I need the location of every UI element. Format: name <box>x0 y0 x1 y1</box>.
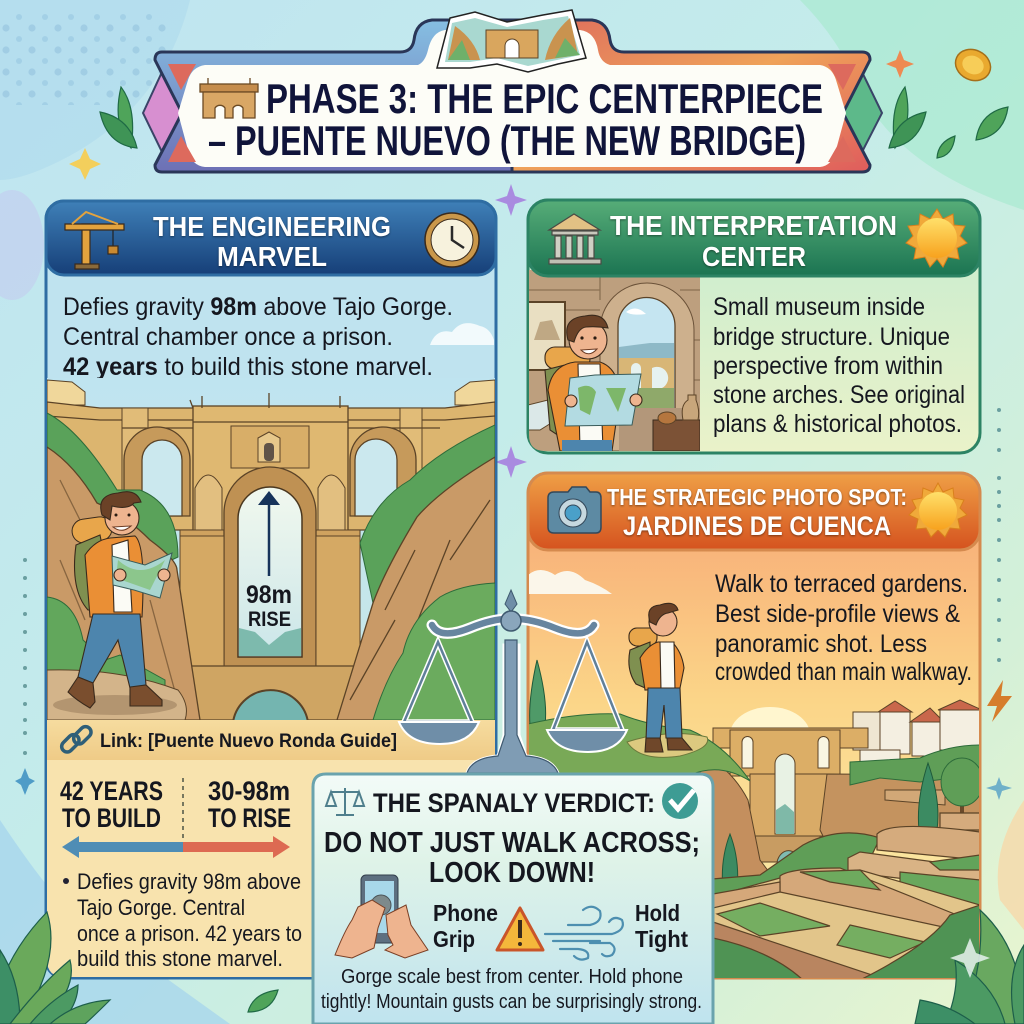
text block: bullet summary: Tajo Gorge. Central <box>77 895 245 920</box>
verdict statement <box>324 827 700 889</box>
text block: interpretation body: stone arches. See original <box>713 381 965 409</box>
text block: photo spot body: panoramic shot. Less <box>715 630 927 658</box>
icon: chain link <box>59 724 93 754</box>
icon: sun <box>906 209 967 267</box>
panel: the strategic photo spot <box>528 473 983 980</box>
text block: interpretation body <box>713 293 965 438</box>
icon: title bridge <box>200 78 258 118</box>
illustration: hiker inside the arches <box>528 270 700 454</box>
label: 98m rise arrow: 98m <box>246 581 292 609</box>
hiker standing <box>629 603 692 752</box>
text block: interpretation body: perspective from within <box>713 352 943 380</box>
text block: engineering intro: 42 years to build this stone marvel. <box>63 353 433 381</box>
decor: foliage bottom right <box>915 910 1024 1024</box>
label: phone grip: Grip <box>433 926 475 952</box>
icon: wind gusts <box>545 907 623 960</box>
title text: PHASE 3: THE EPIC CENTERPIECE <box>266 75 823 122</box>
text block: verdict advice: Gorge scale best from center. Hold phone <box>341 966 683 988</box>
label: hold tight <box>635 900 688 952</box>
panel section: key stats <box>47 760 495 977</box>
panel: the engineering marvel <box>46 201 496 978</box>
title text: – PUENTE NUEVO (THE NEW BRIDGE) <box>208 117 806 164</box>
title text <box>208 75 823 164</box>
text block: engineering intro <box>63 293 494 381</box>
distant cypress <box>530 660 546 725</box>
text block: bullet summary: once a prison. 42 years to <box>77 921 302 946</box>
header: strategic photo spot: JARDINES DE CUENCA <box>623 511 891 541</box>
text block: engineering intro: Defies gravity 98m above Tajo Gorge. <box>63 293 453 321</box>
header: the interpretation center <box>528 200 980 276</box>
text block: verdict advice <box>321 966 702 1013</box>
banner frame <box>155 20 870 172</box>
icon: gold coin <box>950 44 996 86</box>
decor: sparkles <box>15 50 1012 800</box>
stat: 42 years to build: TO BUILD <box>62 803 161 833</box>
text block: photo spot body: crowded than main walkway. <box>715 658 972 686</box>
icon: warning triangle <box>497 908 543 950</box>
header: the engineering marvel: MARVEL <box>217 241 327 272</box>
arrow: dual timeline <box>62 836 290 858</box>
header: the engineering marvel <box>46 201 496 275</box>
icon: classical temple <box>549 214 601 264</box>
icon: hands holding phone <box>335 875 428 958</box>
stat: 30-98m to rise: TO RISE <box>208 803 291 833</box>
terraced gardens <box>700 813 980 980</box>
header: the interpretation center: THE INTERPRETATION <box>610 210 897 241</box>
text block: bullet summary <box>63 869 302 971</box>
stat: 42 years to build <box>60 776 163 833</box>
title banner <box>143 10 882 172</box>
decor: dotted trails <box>23 408 1001 755</box>
hiker with map <box>68 492 172 708</box>
stat: 30-98m to rise: 30-98m <box>208 776 290 806</box>
label: hold tight: Tight <box>635 926 688 952</box>
icon: check badge <box>662 783 698 819</box>
text block: interpretation body: bridge structure. Unique <box>713 323 950 351</box>
icon: small scale <box>326 788 364 815</box>
text block: photo spot body: Best side-profile views & <box>715 600 960 628</box>
header: the engineering marvel: THE ENGINEERING <box>153 211 391 242</box>
icon: sun <box>909 483 967 537</box>
left hill and cliff <box>528 714 775 890</box>
text block: engineering intro: Central chamber once a prison. <box>63 323 393 351</box>
text block: interpretation body: Small museum inside <box>713 293 925 321</box>
town buildings <box>853 700 982 766</box>
bridge <box>47 380 495 722</box>
decor: foliage bottom left <box>0 912 110 1024</box>
right cliff and trees <box>820 744 979 836</box>
icon: folded map with bridge <box>437 10 586 72</box>
verdict statement: LOOK DOWN! <box>429 857 595 889</box>
icon: clock <box>425 213 479 267</box>
link bar: Link: [Puente Nuevo Ronda Guide] <box>100 731 397 752</box>
illustration: jardines de cuenca terraces <box>528 570 983 980</box>
header: strategic photo spot: THE STRATEGIC PHOTO SPOT: <box>607 484 907 510</box>
left cliff and foliage <box>47 413 200 720</box>
label: 98m rise arrow: RISE <box>248 608 291 631</box>
label: phone grip <box>433 900 498 952</box>
label: phone grip: Phone <box>433 900 498 926</box>
panel: the spanaly verdict <box>313 774 713 1024</box>
icon: camera <box>548 487 601 533</box>
hiker with large map <box>545 315 642 454</box>
stat: 30-98m to rise <box>208 776 291 833</box>
right cliff and foliage <box>337 425 495 720</box>
text block: photo spot body: Walk to terraced gardens. <box>715 570 968 598</box>
decorative diamonds <box>143 72 882 152</box>
icon: crane <box>65 212 124 269</box>
label: 98m rise arrow <box>246 491 292 631</box>
small bridge <box>713 728 868 862</box>
verdict heading: THE SPANALY VERDICT: <box>373 788 655 818</box>
header: strategic photo spot <box>528 473 980 550</box>
icon: balance scale <box>399 590 627 773</box>
text block: verdict advice: tightly! Mountain gusts can be surprisingly strong. <box>321 991 702 1013</box>
panel: the interpretation center <box>528 200 980 454</box>
text block: photo spot body <box>715 570 972 686</box>
verdict statement: DO NOT JUST WALK ACROSS; <box>324 827 700 859</box>
text block: bullet summary: Defies gravity 98m above <box>77 869 301 894</box>
text block: interpretation body: plans & historical photos. <box>713 410 962 438</box>
label: hold tight: Hold <box>635 900 680 926</box>
link bar <box>47 720 495 760</box>
header: the interpretation center: CENTER <box>702 241 806 272</box>
text block: bullet summary: build this stone marvel. <box>77 946 283 971</box>
stat: 42 years to build: 42 YEARS <box>60 776 163 806</box>
illustration: puente nuevo bridge and hiker <box>47 378 495 722</box>
